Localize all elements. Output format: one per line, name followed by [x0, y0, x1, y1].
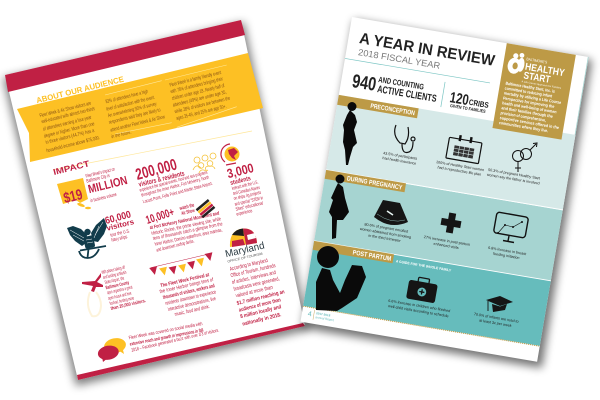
- text: Maryland tourism: [229, 258, 286, 328]
- footer: page number and report name: 4: [307, 311, 312, 318]
- stat: 3,000 students: students: [229, 175, 252, 187]
- footer: page number and report name: 2017-2018: [316, 311, 331, 318]
- text: audience column three: Fleet Week is a family friendly event: [169, 70, 222, 89]
- logo wordmark: BALTIMORE'S: [526, 57, 548, 65]
- stat: 60,000 visitors: [104, 209, 135, 244]
- stat: 60,000 visitors: visitors: [106, 217, 135, 233]
- post partum captions: well-child visits according to schedule: [388, 304, 449, 318]
- text: audience column two: [105, 89, 166, 140]
- stat: 10,000 watch the air show: tens of thousands catch a glimpse from the: [152, 221, 223, 242]
- subtitle: 2018 FISCAL YEAR: [357, 47, 441, 71]
- icon: checkered flags: [196, 199, 215, 218]
- text: social media coverage: [128, 321, 220, 354]
- text: audience column two: level of satisfaction with the event.: [106, 95, 156, 113]
- icon: speech bubbles: [97, 336, 127, 362]
- stat: 10,000 watch the air show: [145, 202, 223, 254]
- pregnancy captions: in the third trimester: [368, 234, 402, 243]
- text: audience column one: well-educated with almost two-thirds: [41, 106, 96, 125]
- icon: bunting flags: [149, 252, 214, 276]
- text: airport open house: and landing at Martin: [102, 270, 127, 281]
- text: audience column one: household income above $75,000.: [46, 135, 101, 154]
- text: healthy start mission: provision of comprehensive,: [500, 110, 546, 123]
- silhouette: mother holding baby: [316, 246, 366, 311]
- text: healthy start mission: health and well-being of women: [502, 100, 557, 114]
- stat: 10,000 watch the air show: Historic Shrine, the prime viewing site, while: [151, 216, 222, 237]
- preconception captions: women say the father is involved: [487, 173, 540, 186]
- stat: 200,000 visitors: visitors & residents: [138, 169, 185, 189]
- icon: monitor with line chart: [493, 212, 529, 242]
- text: Maryland tourism: 8 million locally and: [240, 304, 282, 320]
- pregnancy captions: women abstained from smoking: [359, 227, 411, 240]
- text: audience column one: Fleet Week & Air Show visitors are: [39, 101, 92, 119]
- logo wordmark: START: [523, 71, 551, 86]
- stat: 200,000 visitors: experience the special events, food and sea programs: [139, 170, 208, 194]
- stat: 10,000 watch the air show: watch the: [178, 202, 195, 212]
- text: audience column two: 83% of attendees have a high: [105, 89, 149, 105]
- text: Maryland tourism: Office of Tourism, hundreds: [230, 263, 276, 279]
- stat: 200,000 visitors: Locust Point, Fells Point and Martin State Airport.: [142, 181, 213, 205]
- text: healthy start mission: communities where they live.: [499, 120, 549, 133]
- stat: 120 cribs: 120: [449, 89, 470, 109]
- icon: healthy start logo: [506, 51, 526, 75]
- text: audience column three: attendees (49%) are under age 35,: [172, 90, 227, 109]
- pregnancy captions: feeding initiation: [493, 252, 520, 260]
- stat: 3,000 students: and special "STEM in: [234, 195, 264, 208]
- yellow ribbon: [17, 53, 263, 162]
- text: audience column one: of attendees earning a four-year: [42, 115, 92, 133]
- stat: 3,000 students: and Canadian Navies: [232, 185, 261, 197]
- title: A YEAR IN REVIEW: [358, 30, 496, 70]
- text: airport open house: Baltimore County: [105, 280, 130, 291]
- preconception captions: 100% of Healthy Start women: [436, 160, 485, 172]
- icon: Maryland logo: [224, 228, 266, 264]
- stat: 940 active clients: 940: [351, 71, 378, 96]
- top red band: [5, 20, 245, 92]
- stat: 10,000 watch the air show: and downtown rooftop decks.: [156, 238, 195, 254]
- text: audience column one: [39, 101, 101, 154]
- footer: page number and report name: [307, 309, 335, 323]
- text: audience column two: attend another Fleet Week & Air Show: [110, 114, 166, 134]
- stat: 3,000 students: 3,000: [225, 160, 255, 181]
- text: healthy start mission: Perspective for improving the: [503, 95, 555, 109]
- text: social media coverage: extensive reach and growth in impressions in fall: [129, 327, 204, 348]
- text: airport open house: With planes taking off: [101, 265, 126, 276]
- text: fleet week festival: thousands of visitors, workers and: [162, 283, 215, 301]
- stat: 60,000 visitors: 60,000: [104, 209, 133, 227]
- heading: about our audience: ABOUT OUR AUDIENCE: [35, 75, 125, 105]
- text: fleet week festival: the Inner Harbor brings tens of: [159, 277, 214, 295]
- stat: 120 cribs: GIVEN TO FAMILIES: [450, 103, 486, 114]
- heading: impact: IMPACT: [52, 158, 91, 177]
- text: Maryland tourism: broadcasts were generated,: [233, 276, 281, 293]
- post partum captions: [387, 298, 519, 330]
- stat: 60,000 visitors: Navy ships.: [111, 234, 129, 244]
- stat: 10,000 watch the air show: 10,000+: [145, 206, 176, 227]
- logo wordmark: [521, 57, 566, 90]
- icon: crowd of people: [193, 153, 216, 173]
- icon: stethoscope: [395, 125, 415, 153]
- icon: Maryland logo: Maryland: [224, 241, 266, 260]
- stat: business volume: in business volume: [90, 192, 118, 204]
- text: audience column three: with 76% of attendees bringing their: [170, 76, 224, 95]
- text: Maryland tourism: According to Maryland: [229, 258, 268, 273]
- preconception captions: 43.5% of participants: [383, 151, 418, 161]
- section tab: post partum: POST PARTUM: [352, 249, 392, 263]
- section tab: preconception: PRECONCEPTION: [370, 103, 415, 117]
- icon: Maryland map with 19 million: [57, 178, 91, 209]
- preconception captions: [382, 150, 541, 187]
- text: healthy start mission: Baltimore Healthy Start, Inc. is: [505, 81, 556, 94]
- text: fleet week festival: [159, 272, 217, 318]
- text: airport open house: festival, hosting more: [109, 295, 135, 307]
- stat: 3,000 students: on ships rig projects: [233, 190, 262, 202]
- text: social media coverage: 2018 – Facebook generated a buzz with over 1/3 of visitors.: [131, 328, 220, 354]
- panel: audience and impact page: [3, 20, 309, 386]
- pregnancy captions: [359, 222, 527, 264]
- post partum captions: at least 3x per week: [479, 318, 512, 328]
- text: airport open house: open house and free: [107, 291, 132, 302]
- bottom red band: [77, 323, 305, 380]
- pregnancy captions: 6.8% increase in breast: [488, 246, 526, 256]
- pregnancy captions: 80.6% of pregnant enrolled: [364, 222, 408, 234]
- stat: 10,000 watch the air show: Inner Harbor, Domino waterfront, area marinas,: [154, 227, 223, 248]
- text: Maryland tourism: audience of more than: [238, 297, 282, 314]
- stat: business volume: MILLION: [87, 173, 129, 196]
- stat: 3,000 students: [225, 160, 264, 218]
- text: airport open house: [101, 265, 147, 312]
- stat: 200,000 visitors: throughout the Inner Harbor, Fort McHenry, North: [141, 175, 210, 199]
- icon: graduation cap: [486, 296, 513, 312]
- icon: medical briefcase: [406, 276, 439, 303]
- text: fleet week festival: interactive demonstrations, live: [167, 296, 217, 313]
- text: Maryland tourism: nationally in 2018.: [242, 312, 282, 328]
- pregnancy captions: 27% increase in post-partum: [424, 235, 470, 247]
- icon: gender symbols: [512, 143, 537, 172]
- stat: 940 active clients: AND COUNTING: [378, 75, 425, 92]
- text: healthy start mission: and their families through the: [501, 105, 554, 119]
- text: airport open house: than 20,000 visitors.: [110, 298, 147, 312]
- section tab: post partum: [313, 241, 394, 263]
- text: audience column three: while 28% of visitors are between the: [174, 96, 231, 115]
- text: healthy start mission: committed to reducing infant: [504, 86, 553, 99]
- text: airport open house: State Airport, the: [104, 276, 125, 286]
- preconception captions: had health insurance: [382, 156, 417, 166]
- icon: Maryland map with 19 million: $19: [62, 186, 84, 207]
- icon: ultrasound: [374, 200, 408, 225]
- logo wordmark: A Life Course Approach for Families: [521, 80, 562, 90]
- stat: 3,000 students: experience.: [236, 208, 254, 218]
- text: fleet week festival: The Fleet Week Festival at: [160, 272, 210, 289]
- stat: business volume: Baltimore City is: [86, 173, 111, 185]
- icon: globe: [221, 144, 240, 165]
- text: audience column one: degree or higher. More than one: [43, 121, 95, 140]
- text: audience column three: ages 35-49, and 25% are age 50+.: [176, 104, 227, 122]
- text: audience column two: respondents said they are likely to: [108, 107, 161, 126]
- stat: 940 active clients: [351, 71, 439, 106]
- text: audience column three: children under age 18. Nearly half of: [171, 83, 226, 102]
- silhouette: pregnant woman: [329, 174, 349, 239]
- stat: 3,000 students: Sites" educational: [235, 201, 264, 213]
- stat: business volume: [85, 167, 129, 204]
- text: fleet week festival: music, food and drink.: [174, 304, 211, 318]
- stat: 3,000 students: interact with the U.S.: [231, 180, 259, 192]
- text: airport open house: open organizes a great: [106, 284, 133, 296]
- text: social media coverage: Fleet Week was covered on social media with: [128, 321, 203, 341]
- stat: 200,000 visitors: 200,000: [134, 157, 179, 184]
- icon: plus sign: [439, 211, 463, 235]
- stat: business volume: Fleet Week's impact on: [85, 167, 116, 180]
- icon: navy eagle and anchor emblem: [67, 218, 107, 258]
- stat: 10,000 watch the air show: at Fort McHenry National Monument and: [149, 211, 220, 231]
- text: healthy start mission: mortality by utilizing a Life Course: [504, 90, 562, 105]
- silhouette: woman preconception: [343, 102, 357, 165]
- stat: 940 active clients: ACTIVE CLIENTS: [376, 84, 438, 105]
- preconception captions: had a reproductive life plan: [437, 165, 481, 177]
- text: audience column three: [169, 70, 231, 122]
- icon: Maryland logo: OFFICE OF TOURISM: [227, 252, 263, 264]
- stat: 120 cribs: [448, 89, 491, 114]
- text: healthy start mission: [499, 81, 566, 135]
- text: audience column two: An overwhelming 93% of survey: [107, 101, 158, 119]
- panel: healthy start box: [492, 43, 576, 140]
- stat: 120 cribs: CRIBS: [468, 98, 490, 110]
- section tab: during pregnancy: DURING PREGNANCY: [346, 175, 403, 192]
- stat: 60,000 visitors: tour the U.S.: [110, 228, 131, 239]
- post partum captions: 6.6% increase in children who finished: [388, 299, 451, 313]
- text: Maryland tourism: $1.7 million reaching an: [236, 288, 286, 307]
- pregnancy captions: enhanced visits: [433, 242, 459, 250]
- text: Maryland tourism: valued at more than: [235, 285, 273, 299]
- panel: year in review page: [300, 17, 592, 368]
- logo wordmark: HEALTHY: [524, 62, 566, 79]
- preconception captions: 50.3% of pregnant Healthy Start: [488, 168, 540, 181]
- text: fleet week festival: residents downtown to experience: [165, 289, 217, 307]
- icon: plane with contrail: [82, 273, 103, 316]
- icon: calendar: [446, 133, 483, 164]
- stat: 200,000 visitors: [134, 157, 213, 205]
- section tab: preconception: [337, 95, 419, 118]
- label: a guide for the whole family: A GUIDE FOR THE WHOLE FAMILY: [396, 259, 452, 273]
- text: healthy start mission: supportive services offered in the: [499, 115, 560, 130]
- text: Maryland tourism: of articles, interviews and: [231, 270, 277, 286]
- text: audience column two: in the future.: [111, 129, 132, 140]
- stat: 10,000 watch the air show: Air Show: [181, 208, 195, 217]
- section tab: during pregnancy: [325, 170, 406, 192]
- post partum captions: 70.0% of infants are read to: [474, 312, 519, 324]
- footer: page number and report name: annual Report: [315, 315, 335, 322]
- text: audience column one: in three visitors (44.7%) has a: [45, 128, 95, 146]
